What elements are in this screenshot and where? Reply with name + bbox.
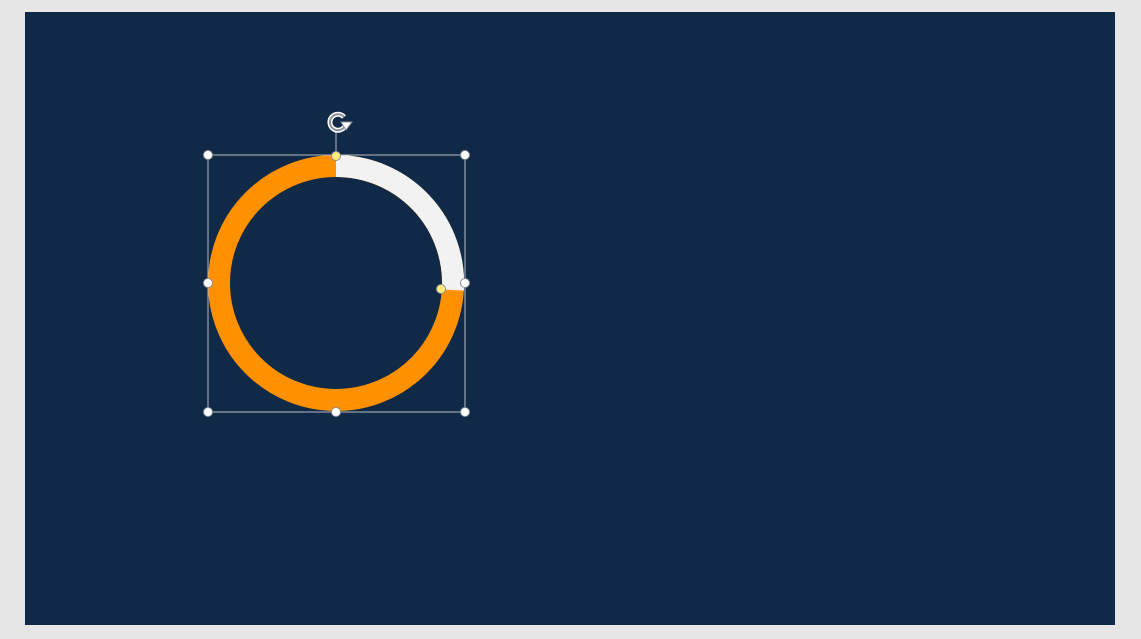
white segment bbox=[336, 166, 453, 290]
orange ring bbox=[219, 166, 453, 400]
donut ring chart bbox=[219, 166, 453, 400]
icon: rotation handle bbox=[330, 114, 352, 130]
selection box with handles bbox=[204, 131, 470, 416]
